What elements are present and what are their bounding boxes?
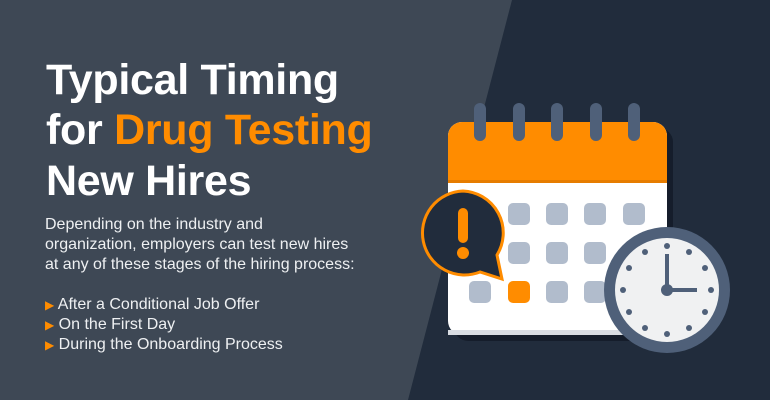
title: Typical Timing bbox=[46, 56, 339, 104]
title: New Hires bbox=[46, 157, 251, 205]
title bbox=[46, 56, 372, 205]
bullet list: ▶ During the Onboarding Process bbox=[45, 336, 283, 353]
bullet list bbox=[45, 296, 283, 353]
intro paragraph: organization, employers can test new hires bbox=[45, 236, 348, 253]
intro paragraph bbox=[45, 216, 355, 273]
bullet list: ▶ After a Conditional Job Offer bbox=[45, 296, 259, 313]
title: for Drug Testing bbox=[46, 106, 372, 154]
icon: clock bbox=[604, 227, 730, 353]
intro paragraph: Depending on the industry and bbox=[45, 216, 263, 233]
icon: alert speech bubble bbox=[422, 191, 503, 279]
intro paragraph: at any of these stages of the hiring process: bbox=[45, 256, 355, 273]
bullet list: ▶ On the First Day bbox=[45, 316, 175, 333]
calendar bbox=[448, 103, 673, 341]
